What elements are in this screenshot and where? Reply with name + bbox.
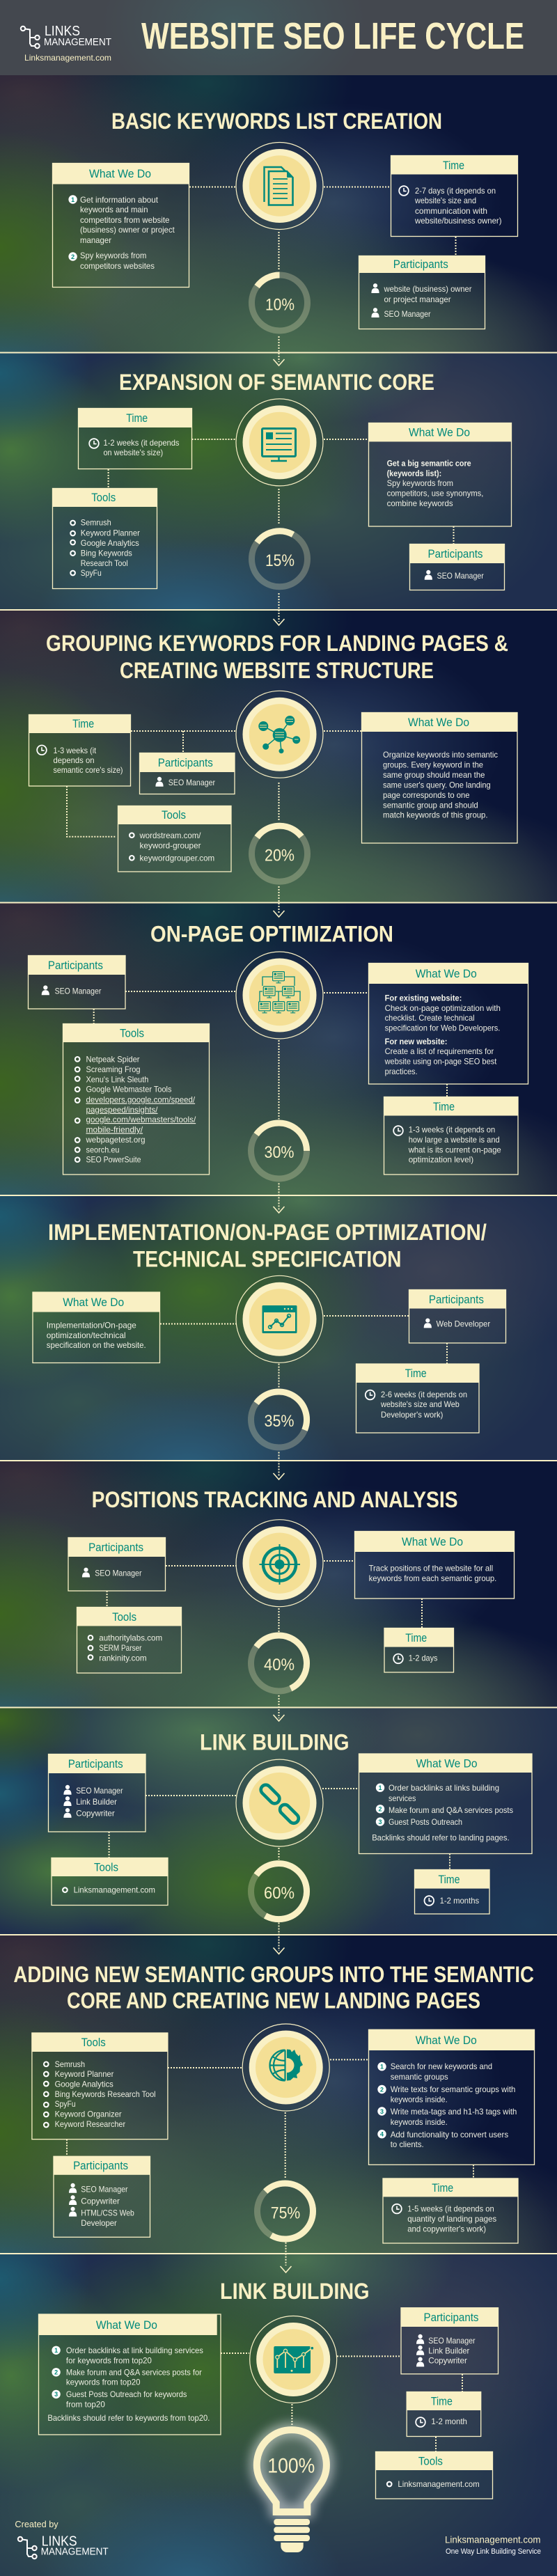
heading: TECHNICAL SPECIFICATION <box>133 1246 401 1271</box>
panel: participants <box>409 1289 505 1343</box>
panel: participants: Participants <box>48 959 103 972</box>
chart: 60% donut <box>240 1853 317 1930</box>
connectors <box>107 1561 422 1718</box>
panel: participants: or project manager <box>384 294 451 304</box>
panel: participants: Copywriter <box>76 1808 115 1818</box>
panel: what we do: Make forum and Q&A services posts for <box>66 2367 202 2377</box>
panel: what we do <box>359 1754 532 1853</box>
panel: what we do: practices. <box>385 1067 418 1076</box>
panel: what we do: Check on-page optimization with <box>385 1003 501 1013</box>
panel: tools: wordstream.com/ <box>139 831 201 840</box>
chart: 10% donut <box>241 264 318 342</box>
panel: what we do <box>52 163 189 287</box>
panel: what we do: same group should mean the <box>383 770 485 780</box>
connectors <box>67 2059 473 2265</box>
panel: time: what is its current on-page <box>408 1145 501 1154</box>
panel: participants: Participants <box>158 756 213 769</box>
panel: time: 1-3 weeks (it depends on <box>409 1124 495 1134</box>
panel: tools: Tools <box>81 2036 106 2049</box>
panel: what we do <box>368 2029 535 2165</box>
panel: time: 1-2 days <box>409 1653 437 1663</box>
panel: time: Time <box>431 2395 453 2408</box>
panel: what we do: Write texts for semantic groups with <box>391 2084 515 2094</box>
panel: time: website/business owner) <box>414 216 501 226</box>
panel: time <box>391 155 518 237</box>
panel: participants: SEO Manager <box>95 1568 142 1578</box>
panel: what we do: 1 <box>380 2064 384 2071</box>
icon: keyword network <box>236 691 323 778</box>
panel: time: 1-5 weeks (it depends on <box>407 2204 494 2214</box>
panel: what we do: What We Do <box>402 1535 463 1548</box>
panel: time: Time <box>443 159 464 172</box>
arrow <box>273 1473 284 1479</box>
panel: participants: Link Builder <box>76 1797 117 1807</box>
icon: light bulb 100%: 100% <box>267 2455 315 2477</box>
header band <box>0 0 557 75</box>
heading: IMPLEMENTATION/ON-PAGE OPTIMIZATION/ <box>48 1219 487 1245</box>
panel: tools: google.com/webmasters/tools/ <box>86 1115 196 1124</box>
panel: tools <box>52 1858 168 1905</box>
panel: tools: Semrush <box>81 518 111 528</box>
panel: section 3 grouping keywords <box>29 630 517 917</box>
arrow <box>273 1715 284 1721</box>
panel: tools: keywordgrouper.com <box>139 854 214 863</box>
panel: time <box>29 714 131 786</box>
chart: 15% donut: 15% <box>265 551 295 570</box>
panel: tools: rankinity.com <box>99 1653 147 1663</box>
panel: what we do: 2 <box>380 2086 384 2093</box>
icon: tablet chart <box>250 2316 337 2403</box>
panel: tools: Tools <box>162 808 186 822</box>
panel: participants: Link Builder <box>428 2346 469 2355</box>
panel: tools: SpyFu <box>55 2099 76 2109</box>
background section 8 <box>0 1935 557 2254</box>
panel: tools: Tools <box>120 1026 144 1040</box>
panel: participants <box>68 1537 166 1591</box>
panel: what we do: Write meta-tags and h1-h3 tags with <box>391 2107 517 2116</box>
panel: what we do: 3 <box>380 2108 384 2115</box>
panel: what we do: Spy keywords from <box>387 478 453 488</box>
background section 5 <box>0 1195 557 1461</box>
icon: target <box>236 1520 323 1607</box>
panel: what we do: (business) owner or project <box>80 225 175 235</box>
heading: LINK BUILDING <box>220 2278 370 2304</box>
panel: what we do: What We Do <box>416 2034 477 2047</box>
panel: tools: Xenu's Link Sleuth <box>86 1074 148 1084</box>
panel: time: 1-2 month <box>431 2417 467 2426</box>
chart: 35% donut <box>240 1381 317 1459</box>
panel: time: and copywriter's work) <box>407 2224 486 2233</box>
panel: what we do <box>32 1292 160 1363</box>
panel: participants <box>139 753 235 794</box>
heading: ON-PAGE OPTIMIZATION <box>150 920 393 947</box>
panel: what we do: 2 <box>54 2369 58 2376</box>
panel: participants: SEO Manager <box>55 986 101 996</box>
panel: section 4 on-page optimization <box>28 920 528 1213</box>
panel: what we do: from top20 <box>66 2399 105 2409</box>
panel: tools <box>63 1023 210 1175</box>
panel: tools: SpyFu <box>81 568 102 578</box>
panel: tools: seorch.eu <box>86 1145 120 1154</box>
panel: tools: Research Tool <box>81 558 128 568</box>
panel: what we do: keywords and main <box>80 205 148 214</box>
chart: 10% donut: 10% <box>265 295 295 315</box>
panel: time: Time <box>405 1631 427 1644</box>
arrow <box>273 619 284 625</box>
panel: participants: Developer <box>81 2218 117 2228</box>
logo: Links Management header <box>21 24 111 63</box>
panel: what we do: 1 <box>54 2347 58 2354</box>
panel: what we do: page corresponds to one <box>383 790 470 800</box>
panel: what we do: Order backlinks at links building <box>389 1783 499 1793</box>
panel: tools: Keyword Planner <box>81 528 140 537</box>
panel: time <box>78 408 192 469</box>
icon: monitor <box>236 399 323 486</box>
chart: 75% donut <box>246 2171 324 2251</box>
chart: 75% donut: 75% <box>271 2204 300 2222</box>
panel: tools: Bing Keywords Research Tool <box>55 2089 156 2099</box>
panel: what we do: keywords from each semantic group. <box>369 1573 496 1583</box>
chart: 30% donut: 30% <box>265 1143 294 1162</box>
panel: participants <box>359 256 485 329</box>
panel: what we do: What We Do <box>409 426 470 439</box>
heading: POSITIONS TRACKING AND ANALYSIS <box>92 1486 458 1512</box>
panel: time: 1-3 weeks (it <box>53 746 97 755</box>
panel: tools: mobile-friendly/ <box>86 1124 143 1134</box>
panel: tools <box>375 2451 493 2499</box>
panel: participants: Participants <box>393 258 448 271</box>
panel: what we do: 2 <box>71 253 74 260</box>
panel: tools: Linksmanagement.com <box>398 2479 480 2489</box>
panel: what we do: 1 <box>71 196 74 203</box>
panel: time: Time <box>72 717 94 730</box>
panel: participants <box>53 2156 150 2237</box>
panel: time: 1-2 weeks (it depends <box>103 438 180 448</box>
panel: what we do: Add functionality to convert users <box>391 2130 508 2139</box>
panel: tools: Keyword Organizer <box>55 2110 122 2119</box>
panel: what we do: specification for Web Developers. <box>385 1023 500 1032</box>
panel: tools: Semrush <box>55 2059 85 2069</box>
chart: 30% donut <box>240 1112 317 1190</box>
panel: tools: Google Analytics <box>81 538 139 548</box>
background section 6 <box>0 1461 557 1708</box>
footer site link: One Way Link Building Service <box>446 2547 541 2556</box>
panel: section 7 link building <box>48 1729 532 1954</box>
panel: what we do: What We Do <box>408 716 469 729</box>
panel: tools <box>118 806 231 872</box>
panel: participants: Participants <box>427 547 483 560</box>
panel: tools: pagespeed/insights/ <box>86 1105 158 1115</box>
background section 2 <box>0 353 557 610</box>
panel: section 1 basic keywords <box>52 108 518 366</box>
heading: LINK BUILDING <box>200 1729 350 1755</box>
panel: time: depends on <box>53 755 95 765</box>
panel: tools: Screaming Frog <box>86 1065 141 1074</box>
panel: what we do: Organize keywords into semantic <box>383 750 498 760</box>
panel: what we do: keywords inside. <box>391 2094 448 2104</box>
heading: CREATING WEBSITE STRUCTURE <box>120 657 434 683</box>
icon: chain link <box>236 1759 323 1846</box>
panel: what we do: What We Do <box>416 967 477 980</box>
panel: what we do: checklist. Create technical <box>385 1013 475 1023</box>
panel: what we do: 4 <box>380 2130 384 2137</box>
panel: what we do: groups. Every keyword in the <box>383 760 483 770</box>
panel: tools: Bing Keywords <box>81 549 132 558</box>
panel: what we do: For new website: <box>385 1037 447 1046</box>
panel: what we do: for keywords from top20 <box>66 2356 152 2366</box>
panel: what we do: What We Do <box>416 1757 478 1770</box>
panel: what we do: Spy keywords from <box>80 251 146 260</box>
panel: participants: Participants <box>423 2311 479 2324</box>
panel: time <box>384 1097 518 1175</box>
panel: what we do: keywords inside. <box>391 2117 448 2127</box>
panel: what we do <box>368 963 528 1084</box>
panel: what we do: 2 <box>378 1806 382 1813</box>
footer credit: MANAGEMENT <box>41 2547 109 2558</box>
panel: participants: website (business) owner <box>384 284 472 294</box>
panel: time: communication with <box>415 206 487 216</box>
panel: time: 1-2 months <box>440 1896 479 1906</box>
chart: 60% donut: 60% <box>264 1884 295 1903</box>
panel: what we do <box>368 423 512 526</box>
connectors <box>109 439 454 622</box>
heading: CORE AND CREATING NEW LANDING PAGES <box>67 1987 480 2013</box>
panel: time: how large a website is and <box>409 1135 500 1145</box>
panel: what we do: competitors websites <box>80 261 155 271</box>
icon: light bulb 100% <box>257 2430 327 2552</box>
connectors <box>221 2353 462 2451</box>
panel: participants: HTML/CSS Web <box>81 2208 134 2217</box>
panel: participants: SEO Manager <box>428 2336 476 2346</box>
chart: 40% donut <box>240 1624 317 1702</box>
panel: time: Time <box>439 1873 460 1886</box>
panel: time: quantity of landing pages <box>407 2214 496 2224</box>
panel: participants: SEO Manager <box>437 571 484 581</box>
panel: tools: Google Webmaster Tools <box>86 1085 171 1094</box>
chart: 20% donut <box>241 815 318 893</box>
heading: EXPANSION OF SEMANTIC CORE <box>119 369 434 395</box>
heading <box>13 1961 534 2013</box>
panel: participants: SEO Manager <box>384 309 430 319</box>
panel: participants <box>409 544 505 590</box>
footer credit: Created by <box>15 2520 58 2529</box>
icon: documents <box>236 142 323 230</box>
panel: what we do: For existing website: <box>385 994 462 1003</box>
panel: tools: Tools <box>91 491 116 504</box>
panel: what we do <box>38 2314 221 2435</box>
panel: participants: Participants <box>68 1757 123 1770</box>
panel: what we do: What We Do <box>63 1296 124 1309</box>
panel: what we do: services <box>389 1793 416 1803</box>
footer site link: Linksmanagement.com <box>445 2534 540 2545</box>
panel: time: website's size and <box>414 196 476 205</box>
panel: time <box>383 2178 518 2243</box>
panel: what we do: Make forum and Q&A services posts <box>389 1805 513 1815</box>
panel: participants: Copywriter <box>428 2356 467 2366</box>
panel: what we do: Order backlinks at link building services <box>66 2346 203 2355</box>
arrow <box>273 1948 284 1954</box>
background section 7 <box>0 1708 557 1935</box>
panel: time <box>356 1364 479 1433</box>
panel: section 9 link building final <box>38 2278 499 2552</box>
panel: tools: Keyword Researcher <box>55 2119 125 2129</box>
panel: time: Time <box>405 1367 427 1380</box>
panel: tools: SEO PowerSuite <box>86 1155 141 1165</box>
panel: participants: Copywriter <box>81 2197 120 2206</box>
panel: participants: SEO Manager <box>168 778 215 787</box>
panel: participants: SEO Manager <box>76 1786 123 1796</box>
icon: browser analytics <box>236 1275 323 1362</box>
heading <box>48 1219 487 1271</box>
icon: globe and gear <box>242 2024 329 2111</box>
panel: time <box>407 2392 481 2437</box>
chart: 35% donut: 35% <box>265 1412 294 1431</box>
panel: what we do: Backlinks should refer to landing pages. <box>372 1833 510 1843</box>
footer site link <box>445 2534 541 2556</box>
panel: time: Developer's work) <box>381 1410 443 1420</box>
background section 1 <box>0 75 557 353</box>
panel: what we do <box>361 712 517 843</box>
panel: what we do: 1 <box>378 1784 382 1791</box>
panel: what we do: manager <box>80 235 111 245</box>
panel: what we do: optimization/technical <box>47 1330 126 1340</box>
panel: time: on website's size) <box>103 448 163 457</box>
panel: participants <box>28 955 125 1009</box>
panel: tools <box>31 2032 168 2139</box>
chart: 40% donut: 40% <box>264 1656 295 1674</box>
panel: participants: Participants <box>429 1293 484 1306</box>
panel: what we do: 3 <box>378 1819 382 1825</box>
panel: what we do: competitors, use synonyms, <box>387 488 483 498</box>
panel: what we do: Track positions of the website for all <box>369 1563 493 1573</box>
panel: what we do: semantic group and should <box>383 800 478 810</box>
arrow <box>273 359 284 366</box>
panel: tools: SERM Parser <box>99 1643 142 1653</box>
background section 4 <box>0 902 557 1195</box>
footer credit: LINKS <box>42 2534 77 2550</box>
panel: what we do: Search for new keywords and <box>391 2061 492 2071</box>
panel: what we do: Implementation/On-page <box>47 1320 136 1330</box>
panel: participants: Web Developer <box>436 1319 490 1328</box>
connectors <box>67 731 361 914</box>
panel: tools <box>52 488 157 589</box>
panel: participants <box>401 2307 499 2374</box>
panel: what we do: Guest Posts Outreach <box>389 1817 462 1827</box>
panel: what we do: to clients. <box>391 2139 424 2149</box>
panel: tools: Tools <box>94 1860 118 1874</box>
panel: what we do: semantic groups <box>391 2072 448 2082</box>
panel: what we do: same user's query. One landing <box>383 780 491 790</box>
panel: what we do: Create a list of requirements for <box>385 1046 494 1056</box>
panel: what we do: competitors from website <box>80 215 170 225</box>
background section 3 <box>0 610 557 902</box>
arrow <box>273 1207 284 1213</box>
panel: tools: keyword-grouper <box>139 841 201 851</box>
panel: section 2 expansion <box>52 369 512 625</box>
panel: tools: developers.google.com/speed/ <box>86 1094 196 1104</box>
panel: what we do: match keywords of this group. <box>383 810 487 820</box>
panel: section 5 implementation <box>32 1219 505 1479</box>
connectors <box>189 187 455 362</box>
panel: time: semantic core's size) <box>53 765 123 775</box>
panel: tools: Tools <box>112 1610 136 1624</box>
panel: tools: Keyword Planner <box>55 2069 113 2079</box>
panel: time: 2-6 weeks (it depends on <box>381 1390 467 1399</box>
panel: what we do: (keywords list): <box>387 469 441 478</box>
panel: section 6 positions tracking <box>68 1486 515 1721</box>
panel: time: website's size and Web <box>380 1399 460 1409</box>
icon: site hierarchy <box>236 952 323 1039</box>
panel: what we do: 3 <box>54 2391 58 2398</box>
panel: tools: Google Analytics <box>55 2079 113 2089</box>
panel: time: Time <box>432 2181 453 2194</box>
arrow <box>280 2266 291 2272</box>
panel: time: optimization level) <box>409 1155 473 1165</box>
panel: tools: Tools <box>418 2455 443 2467</box>
panel: time: Time <box>433 1100 455 1113</box>
panel: tools: Netpeak Spider <box>86 1054 140 1064</box>
panel: what we do: Get a big semantic core <box>387 458 471 468</box>
panel: section 8 new semantic groups <box>13 1961 535 2272</box>
footer credit <box>15 2520 109 2559</box>
panel: what we do: keywords from top20 <box>66 2378 141 2387</box>
connectors <box>94 991 447 1210</box>
panel: tools <box>77 1607 182 1673</box>
chart: 20% donut: 20% <box>265 847 295 865</box>
heading <box>46 630 508 683</box>
panel: what we do: What We Do <box>89 167 151 180</box>
panel: time: Time <box>126 411 148 425</box>
panel: what we do: combine keywords <box>387 498 453 508</box>
logo: Links Management header: LINKS <box>45 24 80 39</box>
connectors <box>109 1789 450 1951</box>
panel: what we do: specification on the website. <box>47 1340 146 1350</box>
panel: time: 2-7 days (it depends on <box>415 186 496 196</box>
section dividers <box>0 352 557 2254</box>
panel: time <box>414 1869 489 1914</box>
panel: what we do: Get information about <box>80 195 159 205</box>
panel: what we do: website using on-page SEO best <box>384 1056 497 1066</box>
logo: Links Management header: MANAGEMENT <box>44 37 111 48</box>
panel: tools: authoritylabs.com <box>99 1633 162 1642</box>
panel: tools: webpagetest.org <box>86 1135 145 1145</box>
heading: BASIC KEYWORDS LIST CREATION <box>111 108 442 134</box>
panel: participants: Participants <box>73 2159 128 2172</box>
arrow <box>273 911 284 917</box>
connectors <box>160 1316 447 1476</box>
chart: 15% donut <box>241 520 318 598</box>
panel: what we do <box>354 1531 515 1599</box>
panel: what we do: Backlinks should refer to keywords from top20. <box>47 2413 210 2423</box>
panel: what we do: Guest Posts Outreach for keywords <box>66 2389 187 2399</box>
panel: participants <box>48 1754 146 1832</box>
background section 9 <box>0 2254 557 2576</box>
panel: time <box>384 1628 454 1672</box>
panel: what we do: What We Do <box>96 2318 157 2332</box>
panel: tools: Linksmanagement.com <box>74 1885 155 1895</box>
panel: participants: Participants <box>88 1541 143 1554</box>
logo: Links Management header: Linksmanagement.com <box>24 53 111 63</box>
panel: participants: SEO Manager <box>81 2184 128 2194</box>
